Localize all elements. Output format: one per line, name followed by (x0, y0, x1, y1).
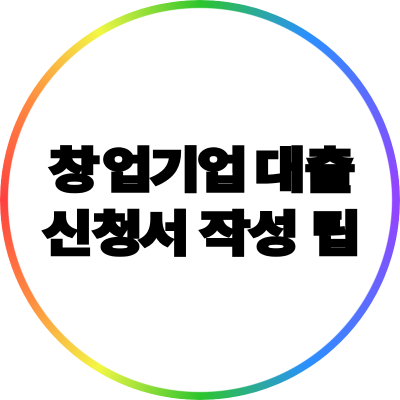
title line 1: 창업기업 대출 (49, 143, 355, 197)
title line 2: 신청서 작성 팁 (42, 207, 361, 261)
